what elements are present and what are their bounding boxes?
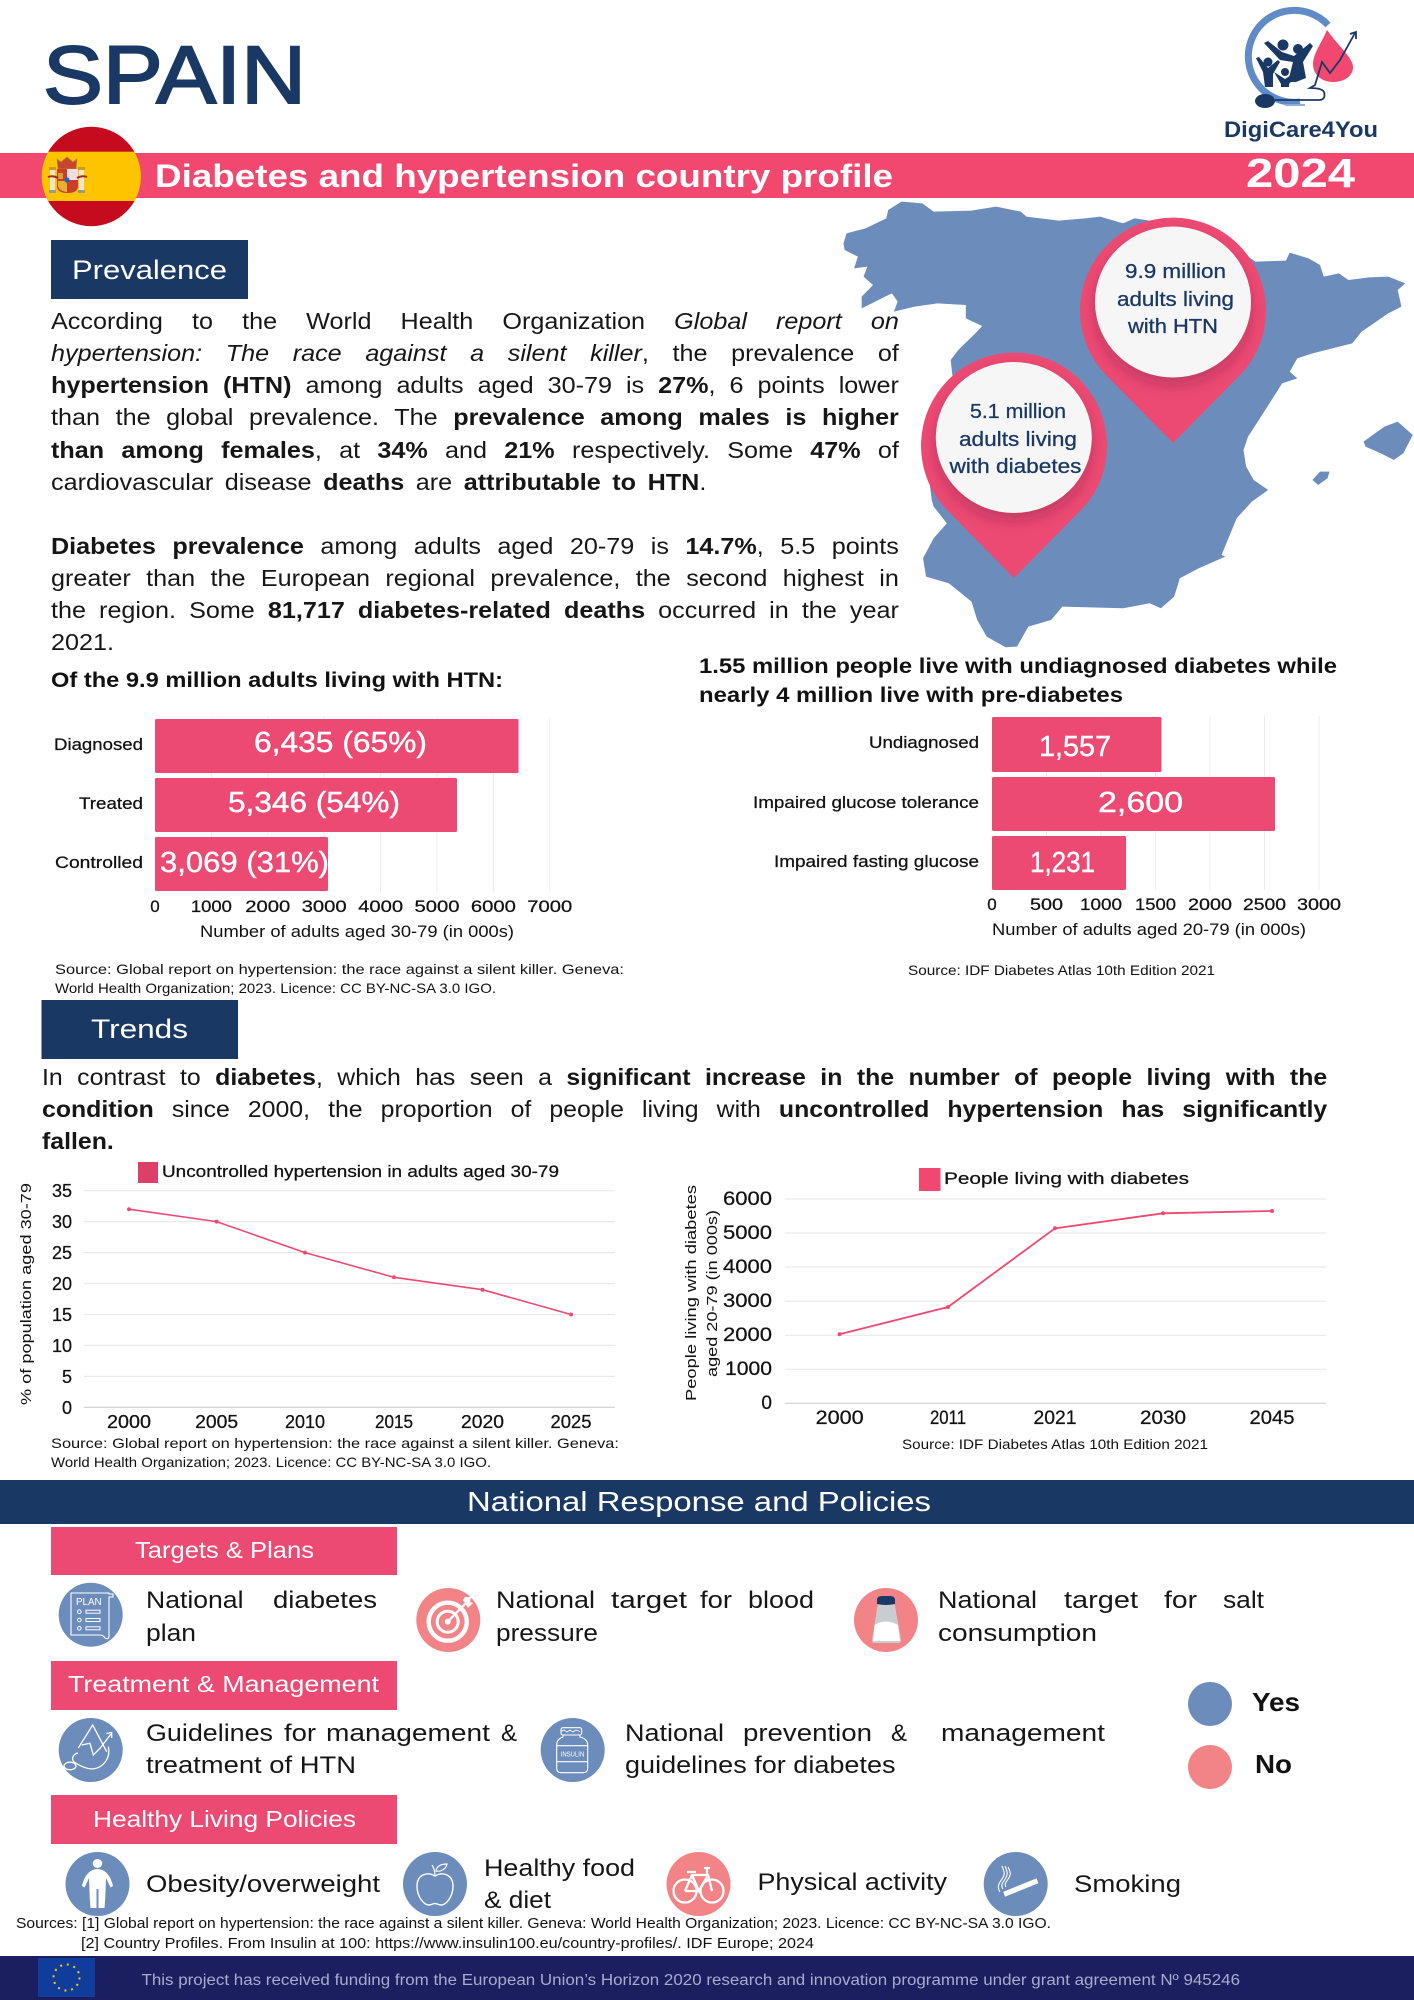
bar chart: undiagnosed diabetes and pre-diabetes: 1500	[1135, 895, 1176, 914]
text: Obesity/overweight: Obesity/overweight	[146, 1871, 380, 1898]
bar chart: adults living with HTN: 3,069 (31%)	[160, 847, 329, 879]
bar chart: adults living with HTN: Treated	[79, 795, 143, 813]
bar chart: undiagnosed diabetes and pre-diabetes: 3000	[1297, 895, 1341, 914]
text: National prevention guidelines: National	[625, 1720, 724, 1747]
line chart: uncontrolled hypertension	[18, 1162, 615, 1432]
line chart: uncontrolled hypertension: 2010	[285, 1412, 325, 1432]
text: National target for blood pressure: target	[611, 1587, 687, 1614]
line chart: uncontrolled hypertension: 10	[52, 1336, 72, 1356]
footer: funding acknowledgement: This project has received funding from the European Union’s Horizon 2020 research and innovation programme under grant agreement Nº 945246	[142, 1972, 1240, 1989]
line chart: people living with diabetes: 2045	[1250, 1408, 1294, 1429]
text: National target for salt consumption: salt	[1223, 1587, 1264, 1614]
text block: hypertension prevalence: hypertension: The race against a silent killer, the prevalence of	[51, 340, 899, 366]
text block: hypertension prevalence: hypertension (HTN) among adults aged 30-79 is 27%, 6 points lower	[51, 372, 899, 398]
legend	[919, 1168, 1189, 1191]
text: National prevention guidelines: &	[891, 1720, 907, 1747]
sources: Sources: [1] Global report on hypertension: the race against a silent killer. Geneva: World Health Organization; 2023. Licence: CC BY-NC-SA 3.0 IGO.	[16, 1915, 1051, 1932]
year: 2024	[1246, 150, 1355, 196]
source note: HTN chart: World Health Organization; 2023. Licence: CC BY-NC-SA 3.0 IGO.	[55, 980, 496, 996]
heading: Trends: Trends	[91, 1014, 188, 1044]
text: National target for salt consumption: consumption	[938, 1620, 1097, 1647]
bar chart: undiagnosed diabetes and pre-diabetes: 1000	[1080, 895, 1122, 914]
line chart: uncontrolled hypertension: 15	[52, 1305, 72, 1325]
line chart: people living with diabetes: 2030	[1140, 1408, 1186, 1429]
bar chart: adults living with HTN: Diagnosed	[54, 736, 143, 754]
text: National target for salt consumption	[938, 1587, 1264, 1647]
text: Smoking: Smoking	[1074, 1871, 1181, 1898]
text: Guidelines for HTN: Guidelines	[146, 1720, 273, 1747]
text: 2021.	[51, 629, 114, 655]
bar chart: undiagnosed diabetes and pre-diabetes: 1,231	[1030, 847, 1095, 879]
text: Healthy food & diet: Healthy food	[484, 1855, 635, 1882]
icon: obesity	[66, 1852, 130, 1916]
source note: diabetes chart: Source: IDF Diabetes Atlas 10th Edition 2021	[908, 962, 1215, 978]
text: Guidelines for HTN: for	[284, 1720, 316, 1747]
bars	[155, 719, 518, 891]
text block: hypertension prevalence	[51, 308, 899, 655]
bar chart: adults living with HTN	[51, 669, 572, 941]
text: National prevention guidelines: guidelines for diabetes	[625, 1752, 896, 1779]
legend: Yes / No: No	[1255, 1749, 1292, 1779]
text: National prevention guidelines: management	[941, 1720, 1105, 1747]
text: Guidelines for HTN: treatment of HTN	[146, 1752, 356, 1779]
sources: [2] Country Profiles. From Insulin at 100: https://www.insulin100.eu/country-profiles/. IDF Europe; 2024	[81, 1935, 814, 1952]
line chart: uncontrolled hypertension: 20	[52, 1274, 72, 1294]
icon: insulin vial	[541, 1718, 605, 1782]
text: National prevention guidelines: prevention	[743, 1720, 872, 1747]
icon: apple	[403, 1852, 467, 1916]
bar chart: adults living with HTN: 3000	[302, 897, 347, 916]
bar chart: undiagnosed diabetes and pre-diabetes: Impaired fasting glucose	[774, 853, 979, 871]
line chart: uncontrolled hypertension: 5	[62, 1367, 72, 1387]
chart heading	[699, 655, 1337, 707]
bar chart: adults living with HTN: 4000	[358, 897, 403, 916]
bar chart: undiagnosed diabetes and pre-diabetes: Impaired glucose tolerance	[753, 794, 979, 812]
chart heading: Of the 9.9 million adults living with HTN:	[51, 669, 503, 692]
logo: DigiCare4You: DigiCare4You	[1224, 117, 1378, 142]
text block: hypertension prevalence: greater than the European regional prevalence, the second highest in	[51, 565, 899, 591]
bar chart: adults living with HTN: 2000	[245, 897, 290, 916]
source note: diabetes trend: Source: IDF Diabetes Atlas 10th Edition 2021	[902, 1436, 1208, 1452]
icon: plan	[59, 1583, 123, 1647]
heading: National Response and Policies: National Response and Policies	[467, 1486, 931, 1517]
text: National diabetes plan	[146, 1587, 377, 1647]
icon: blood pressure target	[416, 1588, 480, 1652]
bar chart: adults living with HTN: 7000	[527, 897, 572, 916]
section label: Targets & Plans	[135, 1537, 314, 1563]
text block: trends summary: condition since 2000, the proportion of people living with uncontrolled hypertension has significantly	[42, 1096, 1327, 1122]
text block: hypertension prevalence: than the global prevalence. The prevalence among males is higher	[51, 404, 899, 430]
pin: 5.1 million with diabetes: 5.1 million	[970, 400, 1066, 423]
icon: EU flag	[38, 1958, 95, 1997]
text block: trends summary: In contrast to diabetes, which has seen a significant increase in the number of people living with the	[42, 1064, 1327, 1090]
bar chart: adults living with HTN: Number of adults aged 30-79 (in 000s)	[200, 923, 514, 941]
legend: Yes / No	[1188, 1682, 1300, 1789]
bar chart: undiagnosed diabetes and pre-diabetes	[699, 655, 1341, 939]
bar chart: undiagnosed diabetes and pre-diabetes: 500	[1030, 895, 1063, 914]
pin: 9.9 million with HTN: 9.9 million	[1125, 260, 1226, 283]
line chart: uncontrolled hypertension: 2025	[550, 1412, 592, 1432]
line chart: people living with diabetes: 1000	[725, 1359, 772, 1380]
line chart: uncontrolled hypertension: 2005	[195, 1412, 238, 1432]
bar chart: adults living with HTN: 5000	[414, 897, 460, 916]
bar chart: undiagnosed diabetes and pre-diabetes: 2,600	[1098, 787, 1183, 819]
footer: funding acknowledgement	[0, 1956, 1414, 2000]
pin: 5.1 million with diabetes	[921, 353, 1107, 578]
legend: Yes / No: Yes	[1252, 1687, 1300, 1717]
text: National target for blood pressure: pressure	[496, 1620, 598, 1647]
heading: Prevalence: Prevalence	[72, 255, 227, 285]
bar chart: undiagnosed diabetes and pre-diabetes: 0	[987, 895, 997, 914]
chart heading: 1.55 million people live with undiagnosed diabetes while	[699, 655, 1337, 678]
section label	[51, 1661, 397, 1710]
line chart: people living with diabetes: 2021	[1034, 1408, 1076, 1429]
text: National diabetes plan: National	[146, 1587, 244, 1614]
text block: hypertension prevalence: than among females, at 34% and 21% respectively. Some 47% of	[51, 437, 899, 463]
text: National target for salt consumption: target	[1064, 1587, 1138, 1614]
title: SPAIN	[43, 30, 306, 121]
line chart: uncontrolled hypertension: 2000	[107, 1412, 151, 1432]
line chart: uncontrolled hypertension: % of population aged 30-79	[18, 1183, 35, 1405]
section label	[51, 1527, 397, 1575]
icon: salt shaker	[854, 1588, 918, 1652]
text: National target for blood pressure: blood	[748, 1587, 814, 1614]
text: Guidelines for HTN	[146, 1720, 517, 1779]
line chart: people living with diabetes: People living with diabetes	[683, 1185, 700, 1401]
bar chart: undiagnosed diabetes and pre-diabetes: 2500	[1243, 895, 1286, 914]
icon: HTN guidelines	[59, 1718, 123, 1782]
line chart: people living with diabetes	[683, 1168, 1326, 1429]
text: Physical activity: Physical activity	[758, 1869, 947, 1896]
text: National target for salt consumption: National	[938, 1587, 1037, 1614]
text block: hypertension prevalence: According to the World Health Organization Global report on	[51, 308, 899, 334]
text: National target for blood pressure: National	[496, 1587, 595, 1614]
line chart: uncontrolled hypertension: 35	[52, 1181, 72, 1201]
line chart: uncontrolled hypertension: 2015	[375, 1412, 413, 1432]
source note: hypertension trend: Source: Global report on hypertension: the race against a silent killer. Geneva:	[51, 1435, 619, 1451]
text: Healthy food & diet	[484, 1855, 635, 1914]
text block: diabetes prevalence: Diabetes prevalence among adults aged 20-79 is 14.7%, 5.5 points	[51, 533, 899, 559]
header band	[0, 150, 1414, 198]
panel: Healthy Living Policies	[51, 1795, 1181, 1916]
bar chart: adults living with HTN: Controlled	[55, 854, 143, 872]
heading: National Response and Policies	[0, 1480, 1414, 1524]
bar chart: adults living with HTN: 6000	[471, 897, 516, 916]
line chart: people living with diabetes: 3000	[723, 1291, 772, 1312]
source note: hypertension trend: World Health Organization; 2023. Licence: CC BY-NC-SA 3.0 IGO.	[51, 1454, 491, 1470]
line chart: people living with diabetes: 2000	[816, 1408, 864, 1429]
heading: Trends	[42, 1000, 238, 1059]
legend: People living with diabetes	[944, 1169, 1189, 1188]
source note: HTN chart: Source: Global report on hypertension: the race against a silent killer. Geneva:	[55, 961, 624, 977]
text block: hypertension prevalence: the region. Some 81,717 diabetes-related deaths occurred in the year	[51, 597, 899, 623]
text: National prevention guidelines	[625, 1720, 1105, 1779]
icon: smoking	[984, 1852, 1048, 1916]
text block: hypertension prevalence: cardiovascular disease deaths are attributable to HTN.	[51, 469, 706, 495]
icon: plan: PLAN	[76, 1597, 102, 1608]
pin: 5.1 million with diabetes: with diabetes	[948, 455, 1082, 478]
text: National target for blood pressure: for	[700, 1587, 732, 1614]
icon: insulin vial: INSULIN	[561, 1752, 584, 1759]
panel: Targets & Plans	[51, 1527, 1264, 1652]
line chart: people living with diabetes: 6000	[723, 1189, 772, 1210]
line chart: uncontrolled hypertension: 2020	[461, 1412, 504, 1432]
sources	[16, 1915, 1051, 1952]
line chart: people living with diabetes: 4000	[723, 1257, 772, 1278]
pin: 5.1 million with diabetes: adults living	[959, 428, 1077, 451]
legend: Uncontrolled hypertension in adults aged 30-79	[162, 1163, 559, 1181]
text: Guidelines for HTN: &	[501, 1720, 517, 1747]
map outline	[843, 202, 1413, 647]
text: National diabetes plan: diabetes	[273, 1587, 377, 1614]
source note: hypertension trend	[51, 1435, 619, 1470]
line chart: uncontrolled hypertension: 0	[62, 1398, 72, 1418]
text: Healthy food & diet: & diet	[484, 1887, 551, 1914]
text: National target for salt consumption: for	[1164, 1587, 1197, 1614]
icon: Spanish flag	[40, 126, 142, 228]
heading: Prevalence	[51, 240, 248, 299]
bar chart: undiagnosed diabetes and pre-diabetes: 1,557	[1039, 731, 1111, 763]
line chart: people living with diabetes: 0	[761, 1393, 772, 1414]
line chart: people living with diabetes: 2011	[930, 1408, 966, 1429]
bar chart: undiagnosed diabetes and pre-diabetes: 2000	[1188, 895, 1232, 914]
line chart: people living with diabetes: aged 20-79 (in 000s)	[704, 1210, 721, 1377]
line chart: uncontrolled hypertension: 30	[52, 1212, 72, 1232]
bar chart: undiagnosed diabetes and pre-diabetes: Undiagnosed	[869, 734, 979, 752]
bars	[992, 717, 1275, 890]
icon: bicycle	[666, 1852, 730, 1916]
bar chart: adults living with HTN: 5,346 (54%)	[228, 787, 400, 819]
line chart: people living with diabetes: 2000	[723, 1325, 772, 1346]
pin: 9.9 million with HTN: with HTN	[1127, 315, 1218, 338]
text: National diabetes plan: plan	[146, 1620, 196, 1647]
bar chart: undiagnosed diabetes and pre-diabetes: Number of adults aged 20-79 (in 000s)	[992, 921, 1306, 939]
source note: HTN chart	[55, 961, 624, 996]
logo: DigiCare4You	[1224, 10, 1378, 142]
bar chart: adults living with HTN: 6,435 (65%)	[254, 727, 427, 759]
bar chart: adults living with HTN: 1000	[191, 897, 232, 916]
chart heading: nearly 4 million live with pre-diabetes	[699, 684, 1123, 707]
section label: Treatment & Management	[68, 1671, 380, 1697]
text block: trends summary	[42, 1064, 1327, 1154]
section label	[51, 1795, 397, 1844]
section label: Healthy Living Policies	[93, 1806, 356, 1832]
text block: trends summary: fallen.	[42, 1128, 113, 1154]
pin: 9.9 million with HTN: adults living	[1117, 288, 1234, 311]
text: National target for blood pressure	[496, 1587, 814, 1647]
coat of arms	[48, 157, 87, 193]
panel: Spain map	[843, 202, 1413, 647]
band title: Diabetes and hypertension country profile	[155, 158, 893, 194]
pin: 9.9 million with HTN	[1080, 218, 1266, 443]
line chart: uncontrolled hypertension: 25	[52, 1243, 72, 1263]
bar chart: adults living with HTN: 0	[150, 897, 160, 916]
text: Guidelines for HTN: management	[326, 1720, 490, 1747]
line chart: people living with diabetes: 5000	[723, 1223, 772, 1244]
panel: Treatment & Management	[51, 1661, 1105, 1782]
